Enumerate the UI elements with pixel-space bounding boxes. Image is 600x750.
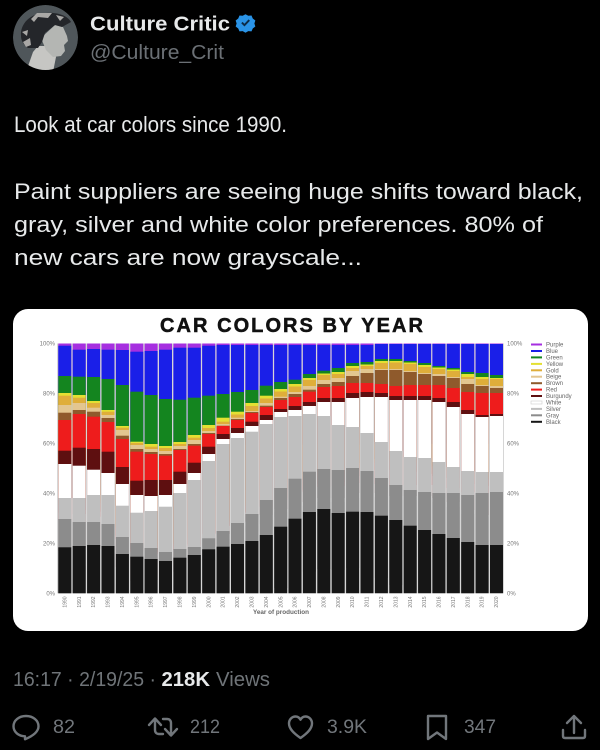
timestamp and views: Views — [216, 668, 270, 691]
tweet text: Look at car colors since 1990. — [14, 112, 287, 137]
x axis year labels: 2016 — [436, 596, 442, 608]
x axis year labels: 2019 — [480, 596, 486, 608]
tweet text: gray, silver and white color preferences. 80% of — [14, 212, 544, 237]
author handle: @Culture_Crit — [90, 42, 224, 64]
tweet text: Paint suppliers are seeing huge shifts toward black, — [14, 179, 583, 204]
left axis labels: 80% — [43, 392, 56, 398]
bar 2002 — [231, 344, 244, 594]
x axis year labels: 2008 — [321, 596, 327, 608]
bar 2009 — [332, 344, 345, 613]
bar 2006 — [288, 344, 302, 619]
x axis year labels: 2002 — [235, 596, 241, 608]
bar 2017 — [446, 344, 460, 594]
icon: verified badge — [236, 14, 255, 33]
bar 2010 — [346, 344, 359, 612]
author name: Culture Critic — [90, 14, 230, 36]
action: reposts: 212 — [190, 716, 220, 738]
stacked bar chart — [57, 344, 504, 594]
tweet text: new cars are now grayscale... — [14, 245, 362, 270]
x axis year labels: 2004 — [264, 596, 270, 608]
bar 1991 — [72, 344, 86, 594]
bar 1993 — [102, 344, 114, 594]
right axis labels: 0% — [507, 592, 516, 598]
x axis year labels: 1993 — [106, 596, 112, 608]
timestamp and views: 218K — [162, 668, 210, 691]
timestamp and views: 16:17 · 2/19/25 · — [13, 668, 156, 691]
x axis year labels: 2006 — [293, 596, 299, 608]
bar 2013 — [389, 344, 402, 620]
chart title: CAR COLORS BY YEAR — [160, 315, 424, 337]
right axis labels: 60% — [507, 442, 520, 448]
right axis labels — [507, 342, 523, 598]
action: likes — [289, 716, 367, 738]
bar 2012 — [375, 344, 388, 616]
legend: White — [546, 400, 562, 406]
tweet text — [14, 112, 583, 270]
bar 2011 — [360, 344, 374, 612]
legend: Green — [546, 355, 563, 361]
panel: chart card — [13, 309, 588, 661]
left axis labels: 20% — [43, 542, 56, 548]
bar 1992 — [87, 344, 100, 594]
x axis year labels: 1991 — [77, 596, 83, 608]
bar 2005 — [274, 344, 287, 627]
x axis year labels: 1998 — [178, 596, 184, 608]
x axis year labels: 2003 — [250, 596, 256, 608]
legend: Purple — [546, 342, 564, 348]
bar 2019 — [476, 344, 489, 594]
legend: Silver — [546, 407, 561, 413]
bar 1995 — [130, 344, 144, 594]
bar 1990 — [58, 344, 72, 594]
left axis labels: 60% — [43, 442, 56, 448]
x axis year labels: 2007 — [307, 596, 313, 608]
x axis year labels: 2012 — [379, 596, 385, 608]
bar 2008 — [317, 344, 330, 609]
x axis year labels: 2015 — [422, 596, 428, 608]
right axis labels: 80% — [507, 392, 520, 398]
bar 2003 — [245, 344, 258, 594]
legend: Gold — [546, 368, 559, 374]
bar 1999 — [188, 344, 201, 594]
bar 2004 — [260, 344, 273, 594]
legend: Gray — [546, 413, 559, 419]
action: bookmarks — [428, 716, 496, 739]
legend: Red — [546, 388, 557, 394]
bar 2000 — [202, 344, 216, 594]
bar 1997 — [159, 344, 172, 594]
left axis labels: 40% — [43, 492, 56, 498]
x axis year labels: 2018 — [465, 596, 471, 608]
x axis year labels: 1995 — [134, 596, 140, 608]
icon: share — [563, 716, 585, 738]
x axis year labels — [62, 596, 500, 608]
x axis year labels: 1999 — [192, 596, 198, 608]
bar 2007 — [303, 344, 316, 612]
left axis labels: 0% — [46, 592, 56, 598]
legend: Black — [546, 420, 562, 426]
x axis year labels: 2011 — [365, 596, 371, 607]
bar 1998 — [173, 344, 186, 594]
action: replies: 82 — [53, 716, 75, 738]
bar 2001 — [216, 344, 230, 594]
bar 2016 — [432, 344, 446, 594]
x axis year labels: 1996 — [149, 596, 155, 608]
x axis year labels: 2009 — [336, 596, 342, 608]
left axis labels: 100% — [40, 342, 56, 348]
action: reposts — [149, 716, 220, 738]
x axis year labels: 2020 — [494, 596, 500, 608]
x axis year labels: 2017 — [451, 596, 457, 608]
bar 2014 — [404, 344, 417, 626]
x axis year labels: 1992 — [91, 596, 97, 608]
legend: Burgundy — [546, 394, 572, 400]
x axis year labels: 2005 — [278, 596, 284, 608]
right axis labels: 100% — [507, 342, 523, 348]
legend: Beige — [546, 375, 562, 381]
bar 1996 — [144, 344, 158, 594]
left axis labels — [40, 342, 56, 598]
x axis year labels: 2010 — [350, 596, 356, 608]
x axis year labels: 1990 — [62, 596, 68, 608]
action: replies — [14, 716, 75, 739]
bar 2018 — [461, 344, 474, 594]
right axis labels: 20% — [507, 542, 520, 548]
x axis title: Year of production — [253, 610, 309, 616]
action: likes: 3.9K — [327, 716, 367, 738]
bar 1994 — [116, 344, 129, 594]
bar 2020 — [490, 344, 503, 594]
legend: Brown — [546, 381, 563, 387]
avatar: statue of David — [13, 5, 78, 72]
bar 2015 — [418, 344, 431, 630]
legend: Blue — [546, 349, 559, 355]
timestamp and views — [13, 668, 270, 691]
x axis year labels: 1994 — [120, 596, 126, 608]
x axis year labels: 2000 — [206, 596, 212, 608]
right axis labels: 40% — [507, 492, 520, 498]
x axis year labels: 2014 — [408, 596, 414, 608]
legend — [531, 342, 572, 426]
x axis year labels: 2001 — [221, 596, 227, 608]
legend: Yellow — [546, 362, 564, 368]
action: bookmarks: 347 — [464, 716, 496, 738]
x axis year labels: 1997 — [163, 596, 169, 608]
x axis year labels: 2013 — [393, 596, 399, 608]
